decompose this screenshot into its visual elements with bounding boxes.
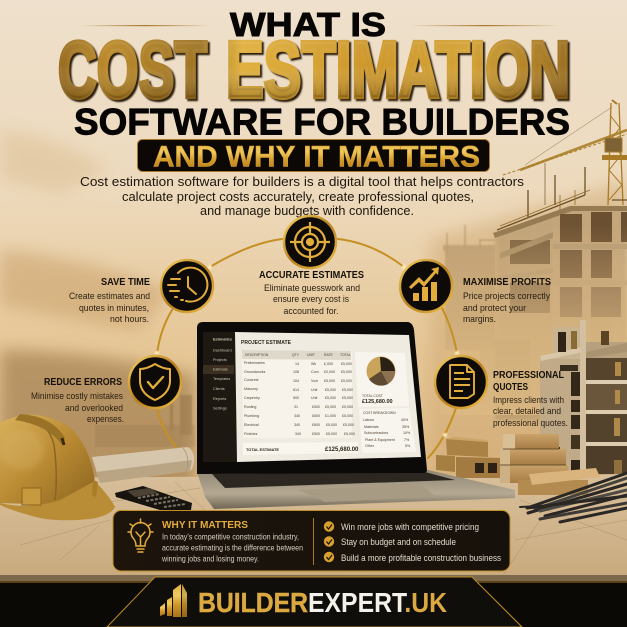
text: professional quotes: QUOTES [493,381,528,393]
laptop screen: Plumbing [244,414,259,418]
laptop screen: £5,000 [342,388,353,392]
text: maximise profits: margins. [463,314,496,324]
why it matters panel: In today's competitive construction industry, [162,532,299,542]
laptop screen: £125,680.00 [362,399,393,405]
laptop screen: Concrete [244,378,259,382]
laptop screen: Electrical [244,423,259,427]
laptop screen: £5,000 [326,423,337,427]
icon: lightbulb [128,519,153,552]
laptop screen: £500 [312,405,320,409]
laptop screen: 340 [294,414,300,418]
text: reduce errors: and overlooked [65,403,123,413]
blueprint roll [92,447,194,483]
laptop screen: DESCRIPTION [245,353,269,357]
laptop screen: £125,680.00 [325,447,359,453]
laptop screen: TOTAL COST [362,394,383,398]
laptop sidebar: Projects [213,358,227,362]
laptop screen: Roofing [244,405,256,409]
why it matters panel: Build a more profitable construction business [341,553,501,563]
laptop screen: Materials [364,425,379,429]
laptop screen: TOTAL [340,353,351,357]
background building [440,167,627,420]
laptop screen: Cum [311,370,319,374]
text: accurate estimates: accounted for. [284,306,338,316]
text: professional quotes [493,369,568,428]
text: reduce errors: Minimise costly mistakes [31,391,123,401]
laptop screen: 340 [294,423,300,427]
laptop screen: Masonry [244,387,258,391]
hard hat [0,414,115,520]
icon: accurate estimates target [284,216,336,268]
text: maximise profits: and protect your [463,303,526,313]
laptop screen: £5,000 [342,414,353,418]
why it matters panel: Stay on budget and on schedule [341,537,456,547]
laptop sidebar [203,332,237,462]
text: accurate estimates: Eliminate guesswork and [264,283,360,293]
laptop bezel [197,322,427,474]
title: cost estimation: COST [60,27,209,116]
laptop sidebar: Estimatics [213,338,232,342]
text: maximise profits: Price projects correctly [463,291,550,301]
laptop base [197,470,515,509]
laptop sidebar: Estimate [213,368,228,372]
laptop screen: £1,000 [325,414,336,418]
laptop screen: 104 [293,379,299,383]
laptop screen: 5% [405,444,411,448]
laptop screen: COST BREAKDOWN [363,411,396,415]
why it matters panel: winning jobs and losing money. [161,554,259,564]
text: reduce errors: expenses. [87,414,124,424]
laptop sidebar: Reports [213,397,226,401]
laptop screen: Wk [311,362,316,366]
laptop [197,322,515,509]
title: software for builders: SOFTWARE FOR BUILDERS [74,102,570,142]
laptop screen: £5,000 [344,432,355,436]
laptop sidebar: Dashboard [213,348,232,352]
text: accurate estimates: ensure every cost is [273,294,349,304]
text: reduce errors: REDUCE ERRORS [44,376,122,388]
text: professional quotes: professional quotes. [493,418,568,428]
laptop screen: £5,000 [341,370,352,374]
text: professional quotes: PROFESSIONAL [493,369,565,381]
why it matters panel [113,510,510,571]
laptop screen: £5,000 [324,379,335,383]
subtitle banner: AND WHY IT MATTERS [153,140,480,174]
icon: maximise profits chart [400,260,452,312]
laptop screen: £600 [312,414,320,418]
laptop sidebar: Clients [213,387,225,391]
laptop screen: 340 [295,432,301,436]
laptop sidebar: Templates [213,377,230,381]
logo wordmark: BUILDEREXPERT.UK [198,587,447,618]
why it matters panel: WHY IT MATTERS [162,519,248,531]
text: accurate estimates [259,269,364,316]
calculator [115,486,192,510]
laptop screen: £5,000 [342,396,353,400]
text: professional quotes: Impress clients with [493,395,564,405]
laptop screen: £5,000 [341,379,352,383]
why it matters panel: Win more jobs with competitive pricing [341,522,479,532]
laptop screen: £5,000 [343,423,354,427]
laptop screen: £5,000 [342,405,353,409]
intro paragraph [80,174,525,218]
title: what is: WHAT IS [230,6,386,43]
laptop screen: Labour [363,418,375,422]
laptop screen: Unit [311,396,317,400]
laptop screen: 35% [402,425,410,429]
laptop screen: Vcm [311,379,318,383]
distant site silhouette [95,385,195,447]
icon: reduce errors shield [129,356,181,408]
text: save time: Create estimates and [69,291,150,301]
foreground concrete building [540,320,627,512]
text: save time: SAVE TIME [101,276,150,288]
title: cost estimation: COST [58,25,207,114]
logo icon: buildings [160,584,187,617]
laptop screen: £5,000 [325,405,336,409]
laptop screen: £5,000 [326,432,337,436]
laptop screen: £5,000 [325,388,336,392]
laptop screen: UNIT [307,353,315,357]
title: cost estimation: COST [58,25,207,114]
text: reduce errors [31,376,124,424]
laptop screen: £500 [312,432,320,436]
laptop screen: 40% [401,418,409,422]
laptop screen: Carpentry [244,396,260,400]
laptop screen: Other [365,444,375,448]
laptop screen: 500 [293,396,299,400]
title: cost estimation [58,25,572,116]
icon: professional quotes document [435,356,487,408]
icon: save time clock [161,260,213,312]
text: maximise profits: MAXIMISE PROFITS [463,276,551,288]
laptop screen: £5,000 [325,396,336,400]
laptop screen: RATE [324,353,334,357]
laptop screen: Finishes [244,432,258,436]
laptop screen: Preliminaries [244,361,265,365]
crane [503,100,627,205]
laptop screen: 614 [293,388,299,392]
laptop screen: Groundworks [244,370,266,374]
text: maximise profits [463,276,551,324]
laptop screen: 7% [404,438,410,442]
laptop sidebar: Settings [213,406,227,410]
laptop screen: Subcontractors [364,431,388,435]
laptop screen [235,332,421,462]
text: save time: quotes in minutes, [79,303,149,313]
laptop screen: 108 [293,370,299,374]
intro paragraph: calculate project costs accurately, create professional quotes, [122,189,474,204]
text: save time [69,276,150,324]
laptop screen: PROJECT ESTIMATE [241,340,292,346]
laptop screen: 31 [294,405,298,409]
laptop screen: £0,000 [324,370,335,374]
text: professional quotes: clear, detailed and [493,406,561,416]
text: accurate estimates: ACCURATE ESTIMATES [259,269,364,281]
desk with blueprints [0,474,627,580]
laptop screen: Unit [311,388,317,392]
laptop screen: TOTAL ESTIMATE [246,447,279,452]
icon: check marks [324,521,334,562]
footer band [0,575,627,627]
laptop screen: £,000 [324,362,333,366]
why it matters panel: accurate estimating is the difference between [162,544,303,552]
intro paragraph: Cost estimation software for builders is a digital tool that helps contractors [80,174,525,189]
connecting gold arc [155,239,459,458]
timber stack [500,434,600,495]
intro paragraph: and manage budgets with confidence. [200,203,414,218]
laptop screen: 14 [295,362,299,366]
steel rebar bundle [520,473,627,522]
bricks [436,437,500,478]
laptop screen: £5,000 [341,362,352,366]
laptop screen: QTY [292,353,300,357]
laptop pie chart [366,356,396,386]
text: save time: not hours. [110,314,149,324]
laptop screen: £600 [312,423,320,427]
laptop screen: 10% [403,431,411,435]
laptop screen: Plant & Equipment [365,438,395,442]
